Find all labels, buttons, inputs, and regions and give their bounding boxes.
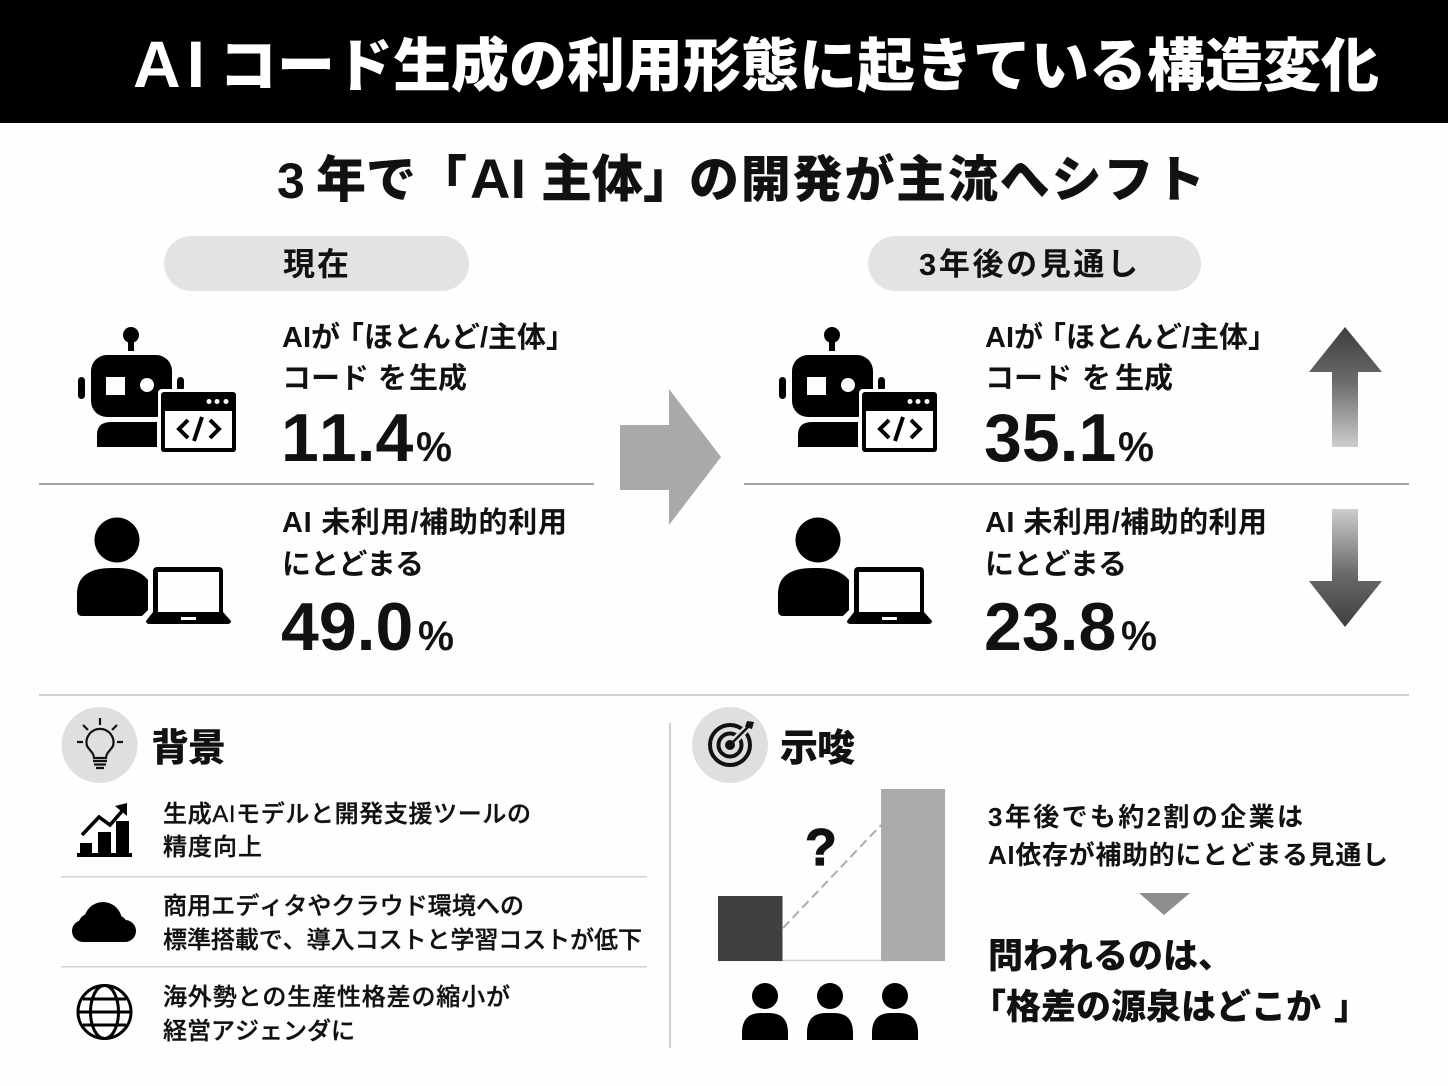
text: key question: 問われるのは、 xyxy=(988,937,1233,976)
number: 49.0%: 49.0 xyxy=(281,589,413,665)
subtitle: AI xyxy=(470,147,526,210)
text: implication statement: 3年後でも約2割の企業は xyxy=(988,802,1303,832)
panel: three years later xyxy=(778,236,1382,665)
text: AI-led share now: 「ほとんど/主体」 xyxy=(335,321,575,354)
number: 23.8%: 23.8 xyxy=(984,589,1116,665)
number: 23.8%: % xyxy=(1121,612,1157,659)
title banner xyxy=(0,0,1448,123)
icon: rising bar chart xyxy=(77,803,132,857)
text: background 3 xyxy=(163,984,510,1045)
text: AI-led share now xyxy=(282,320,575,395)
marker: down triangle xyxy=(1139,893,1190,915)
chart: gap bars: ? xyxy=(805,819,837,877)
arrow: down xyxy=(1309,509,1382,627)
text: non-use share future xyxy=(985,506,1267,581)
subtitle: 年で xyxy=(316,152,416,208)
text: AI-led share future: を xyxy=(1082,363,1111,395)
text: non-use share now: AI 未利用/補助的利用 xyxy=(282,506,567,539)
text: AI-led share now: を xyxy=(378,363,407,395)
text: key question: 」 xyxy=(1334,988,1369,1027)
text: AI-led share future xyxy=(985,320,1277,395)
text: background 2: 商用エディタやクラウド環境への xyxy=(163,892,524,920)
text: key question: 「 xyxy=(971,988,1006,1027)
text: key question: 格差の源泉はどこか xyxy=(1006,988,1321,1027)
icon: person with laptop xyxy=(77,518,231,624)
text: non-use share now: にとどまる xyxy=(282,548,424,581)
text: AI-led share future: 「ほとんど/主体」 xyxy=(1037,321,1277,354)
pill: current: 現在 xyxy=(283,246,349,282)
panel: current xyxy=(77,236,575,665)
text: background 3: 経営アジェンダに xyxy=(163,1018,355,1045)
text: background 1: 生成AIモデルと開発支援ツールの xyxy=(163,800,531,828)
icon: light bulb xyxy=(62,707,138,783)
subtitle: 主体」 xyxy=(541,151,694,208)
icon: target xyxy=(692,707,768,783)
pill: outlook: 3年後の見通し xyxy=(919,247,1138,282)
text: background 1 xyxy=(163,800,531,861)
text: AI-led share now: コード xyxy=(282,363,369,395)
text: AI-led share now: 生成 xyxy=(409,362,467,395)
text: AI-led share future: コード xyxy=(985,363,1072,395)
heading: background: 背景 xyxy=(151,728,226,770)
text: AI-led share now: AIが xyxy=(282,320,340,354)
number: 35.1%: % xyxy=(1118,423,1154,470)
text: implication statement xyxy=(988,802,1388,870)
icon: cloud xyxy=(72,902,136,942)
number: 11.4%: % xyxy=(416,423,452,470)
title banner: コード生成の利用形態に起きている構造変化 xyxy=(219,34,1379,99)
text: non-use share future: AI 未利用/補助的利用 xyxy=(985,506,1267,539)
number: 11.4%: 11.4 xyxy=(281,400,414,476)
text: AI-led share future: 生成 xyxy=(1115,362,1173,395)
text: AI-led share future: AIが xyxy=(985,320,1043,354)
arrow: up xyxy=(1309,327,1382,447)
number: 49.0%: % xyxy=(418,612,454,659)
text: non-use share now xyxy=(282,506,567,581)
text: non-use share future: にとどまる xyxy=(985,548,1127,581)
text: background 2: 標準搭載で、導入コストと学習コストが低下 xyxy=(163,927,642,954)
icon: robot with code window xyxy=(78,327,239,455)
panel: background xyxy=(61,707,647,1045)
icon: person with laptop xyxy=(778,518,932,624)
text: implication statement: AI依存が補助的にとどまる見通し xyxy=(988,840,1388,870)
icon: three people xyxy=(742,983,918,1040)
subtitle: 「 xyxy=(417,152,467,208)
subtitle: 3 xyxy=(277,153,305,209)
subtitle xyxy=(277,147,1205,210)
icon: robot with code window xyxy=(779,327,940,455)
number: 35.1%: 35.1 xyxy=(984,400,1116,476)
heading: implications: 示唆 xyxy=(780,728,855,770)
pill: current xyxy=(164,236,469,291)
subtitle: の開発が主流へシフト xyxy=(689,152,1205,208)
text: key question xyxy=(971,937,1369,1027)
arrow: current to future xyxy=(620,389,721,525)
icon: globe xyxy=(78,986,131,1038)
text: background 1: 精度向上 xyxy=(163,834,262,861)
title banner: AI xyxy=(133,27,205,101)
text: background 3: 海外勢との生産性格差の縮小が xyxy=(163,984,510,1011)
panel: implications xyxy=(692,707,1388,1040)
text: background 2 xyxy=(163,892,642,954)
pill: outlook xyxy=(868,236,1201,291)
chart: gap bars xyxy=(718,789,945,961)
